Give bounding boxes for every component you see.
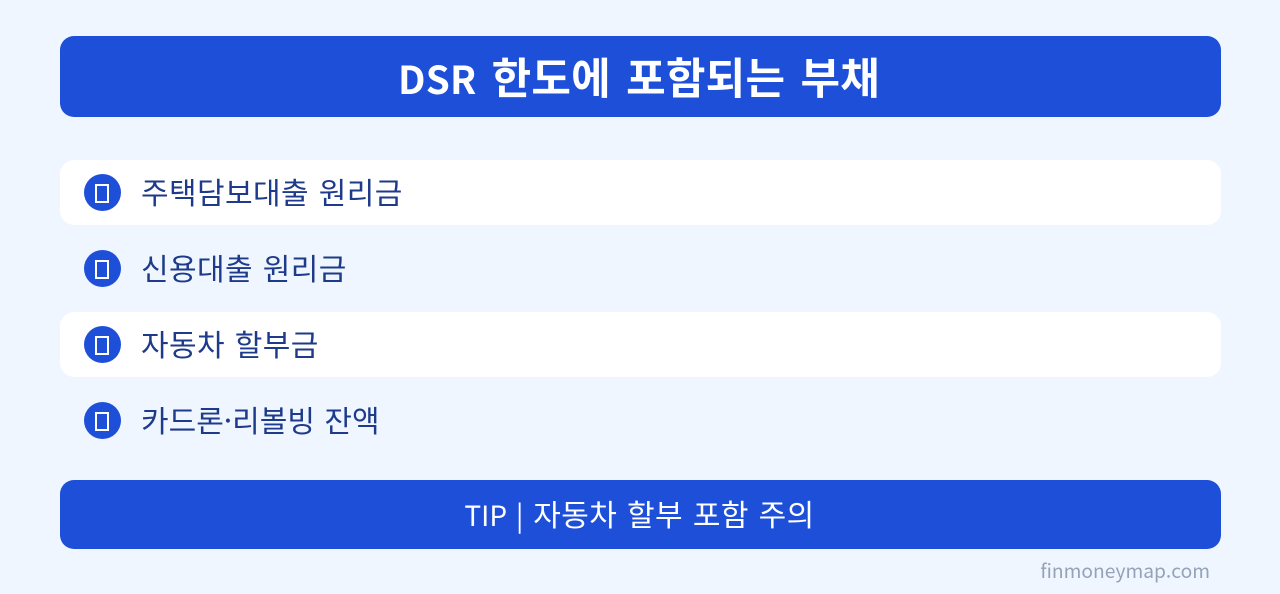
source credit: finmoneymap.com <box>1040 556 1210 584</box>
icon: item 4 bullet <box>84 402 121 439</box>
title: DSR 한도에 포함되는 부채 <box>398 45 880 107</box>
text: item 2: 신용대출 원리금 <box>141 245 347 289</box>
icon: item 3 bullet <box>84 326 121 363</box>
panel: item 1 <box>60 160 1221 225</box>
panel: item 3 <box>60 312 1221 377</box>
text: item 1: 주택담보대출 원리금 <box>141 169 403 213</box>
panel: item 2 <box>84 245 347 289</box>
text: item 4: 카드론·리볼빙 잔액 <box>141 397 380 441</box>
tip banner: TIP | 자동차 할부 포함 주의 <box>464 491 815 535</box>
icon: item 1 bullet <box>84 174 121 211</box>
panel: item 4 <box>84 397 380 441</box>
icon: item 2 bullet <box>84 250 121 287</box>
title <box>60 36 1221 117</box>
text: item 3: 자동차 할부금 <box>141 321 319 365</box>
tip banner <box>60 480 1221 549</box>
